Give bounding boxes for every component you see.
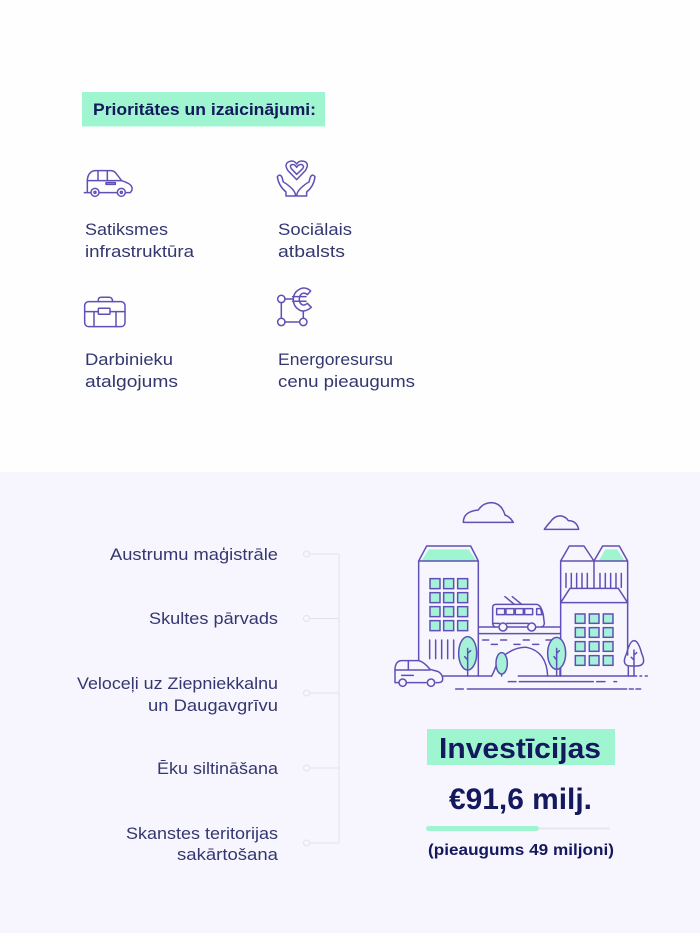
value: €91,6 milj.: €91,6 milj. [449,783,592,816]
left building [419,546,478,676]
item: Skanstes teritorijas: sakārtošana [177,845,279,864]
heading: priorities: Prioritātes un izaicinājumi: [93,101,316,119]
text: Satiksmes infrastruktūra: infrastruktūra [85,242,195,261]
illustration: city with bridge [395,503,647,689]
text: Darbinieku atalgojums [85,350,178,391]
text: Sociālais atbalsts [278,220,352,261]
text: Energoresursu cenu pieaugums: cenu pieaugums [278,372,415,391]
bridge [479,627,560,676]
item: Ēku siltināšana: Ēku siltināšana [157,759,279,778]
icon: euro network [278,288,311,326]
icon: car [84,171,132,196]
text: Energoresursu cenu pieaugums: Energoresursu [278,350,393,369]
heading: Investīcijas: Investīcijas [439,733,601,765]
ground lines [443,676,647,689]
item: Austrumu maģistrāle: Austrumu maģistrāle [110,545,278,564]
right buildings [561,546,628,676]
item: Veloceļi [77,674,278,715]
icon: briefcase [85,297,125,327]
icon: heart in hands [277,161,315,196]
car [395,661,443,686]
item: Skanstes teritorijas [126,824,279,864]
connector tree [304,551,339,846]
text: Satiksmes infrastruktūra: Satiksmes [85,220,168,239]
heading: priorities [82,92,325,126]
item: Skanstes teritorijas: Skanstes teritorijas [126,824,278,843]
panel: priorities [82,92,415,391]
text: Sociālais atbalsts: atbalsts [278,242,345,261]
item: Veloceļi: un Daugavgrīvu [148,696,278,715]
text: Darbinieku atalgojums: atalgojums [85,372,178,391]
list: investment items [77,545,279,864]
text: Darbinieku atalgojums: Darbinieku [85,350,173,369]
item: Skultes pārvads: Skultes pārvads [149,609,278,628]
text: Satiksmes infrastruktūra [85,220,195,261]
text: growth: (pieaugums 49 miljoni) [428,842,614,859]
item: Veloceļi: Veloceļi uz Ziepniekkalnu [77,674,278,693]
clouds [463,503,579,529]
progress bar [426,826,610,831]
text: Sociālais atbalsts: Sociālais [278,220,352,239]
trolleybus [493,597,544,631]
panel: investments [0,472,700,933]
trees [459,637,644,676]
text: Energoresursu cenu pieaugums [278,350,415,391]
